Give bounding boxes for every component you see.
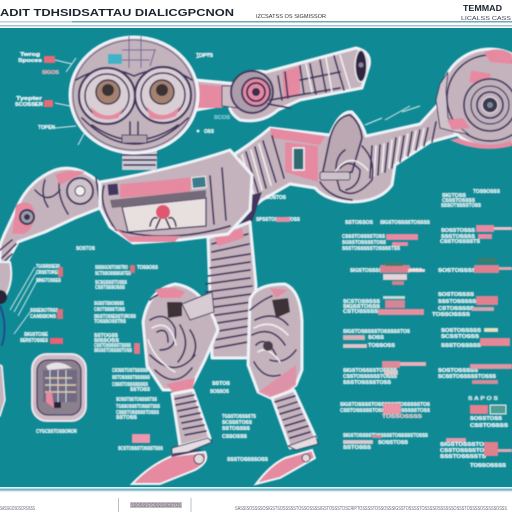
callouts: centre column: SISSOSS bbox=[94, 338, 119, 344]
row 6: CSSTOSSSSTOS bbox=[440, 448, 488, 454]
callouts: centre column: SSTOSS bbox=[130, 387, 150, 393]
callouts: upper right: SIGSTOSSSSTOSSSS bbox=[380, 220, 430, 226]
callouts: under torso and between legs: SCSSSTOSS bbox=[222, 420, 252, 426]
callouts: left column: SIGSTOSE bbox=[24, 332, 48, 338]
callouts: upper right bbox=[256, 106, 512, 252]
row 4: SSSTOSSSSTOSS bbox=[343, 380, 391, 386]
chip caption: CYGCSSTOSSOROR bbox=[36, 429, 77, 435]
callouts: left column: TGOSRSSESS bbox=[36, 264, 60, 270]
callouts: centre column: SIGSTOSSESSTOROSS bbox=[94, 314, 136, 320]
row 3: TOSSOSS bbox=[368, 343, 395, 349]
callouts: upper right: SOSSTOSSS bbox=[441, 228, 475, 234]
row 6: SIGSTOSSSTOS bbox=[440, 442, 488, 448]
row 4 bbox=[343, 361, 512, 386]
callouts: head bbox=[15, 52, 230, 145]
robot spine bbox=[206, 222, 256, 358]
callouts: left column: SSSESOTRSS bbox=[30, 308, 58, 314]
row 4: SIGSTOSSSSTOSSSS bbox=[343, 368, 397, 374]
callouts: centre column: CSSTSSSOSSS bbox=[95, 285, 125, 291]
callouts: centre column: SSTOSS bbox=[116, 415, 137, 421]
callouts: head: Spoces bbox=[18, 58, 42, 64]
callouts: upper right: SSTOSSOS bbox=[345, 220, 373, 226]
callouts: upper right: CSSSTOSSSSTOSS bbox=[342, 234, 385, 240]
footer: centre box bbox=[118, 498, 191, 512]
footer: centre box: SSOSSISTOSSSSIGSTOS bbox=[131, 503, 182, 509]
callouts: centre column: TOSSSOSSTRS bbox=[94, 319, 126, 325]
robot head bbox=[70, 36, 198, 170]
callouts: upper right: TOSSOSSS bbox=[473, 189, 500, 195]
row 2: SIGSSTOSSS bbox=[343, 304, 380, 310]
callouts: centre column: SGSSTSSOSSSS bbox=[94, 301, 124, 307]
row 2: SOSTOSSSS bbox=[438, 292, 474, 298]
callouts: centre column: CSSSTOSSSSSSSS bbox=[112, 382, 148, 388]
title: ADIT TDHSIDSATTAU DIALICGPCNON bbox=[0, 8, 234, 19]
callouts: centre column: TOSSOSS bbox=[137, 265, 158, 271]
callouts: upper right: SSSOTSSSSTOSS bbox=[441, 203, 481, 209]
row 2: CSTOSSSSS bbox=[343, 309, 378, 315]
callouts: centre column: SIGSSTOSSSSTOSS bbox=[94, 348, 132, 354]
callouts: centre column: SCSGSSSTOSSS bbox=[95, 280, 127, 286]
right foot bbox=[256, 436, 318, 484]
robot torso bbox=[100, 150, 252, 243]
callouts: right rows bbox=[340, 258, 512, 469]
callouts: centre column: CIOSSTOSTSSSSS bbox=[112, 368, 148, 374]
row 3: SCSSTOSSS bbox=[441, 334, 479, 340]
header right label: TEMMAD bbox=[463, 4, 502, 13]
callouts: under torso and between legs: TGSSTOSSSSTS bbox=[222, 414, 256, 420]
callouts: head: Tyepter bbox=[16, 96, 43, 102]
row 2: CSTOSSSSS bbox=[438, 306, 474, 312]
callouts: centre column: SCSTOSSSTOSSSTSSS bbox=[118, 446, 163, 452]
callouts: head: SIGOS bbox=[42, 70, 59, 76]
control chip module bbox=[32, 354, 86, 421]
row 2 bbox=[343, 292, 498, 318]
row 2: SCSTOSSSSS bbox=[343, 299, 380, 305]
row 6: SSSTOSSSSTS bbox=[440, 454, 486, 460]
callouts: centre column bbox=[94, 265, 163, 452]
row 6: SIGSTOSSSSTOSSSSSTOSSSSSTOSSS bbox=[343, 433, 428, 439]
callouts: centre column: CSOTSSSSTOSS bbox=[94, 307, 125, 313]
row 5: CSSTOSSSS bbox=[470, 423, 508, 429]
robot left arm bbox=[0, 168, 105, 418]
row 3 bbox=[343, 328, 510, 349]
callouts: head: SCOS bbox=[214, 115, 230, 121]
callouts: centre column: TGSSOSSSTOSSSTSSS bbox=[116, 404, 160, 410]
callouts: left column bbox=[10, 264, 63, 344]
callouts: left column: CRSSTORES bbox=[36, 270, 60, 276]
header right label: LICALSS CASS bbox=[461, 16, 511, 22]
callouts: upper right: SSSTOSSSS bbox=[441, 234, 475, 240]
callouts: under torso and between legs: SSTOSSSS bbox=[222, 426, 250, 432]
robot left leg bbox=[132, 284, 218, 484]
footer rules bbox=[0, 487, 512, 492]
callouts: centre column: CSSSTOSSSSSTOSSS bbox=[116, 410, 159, 416]
callouts: upper right: CSSTOSSSSTS bbox=[440, 239, 480, 245]
callouts: under torso and between legs: SSSTOSSSSOSS bbox=[227, 457, 268, 463]
neck bbox=[122, 150, 157, 170]
callouts: centre column: SCTSSOSSSIGSTES bbox=[95, 271, 131, 277]
callouts: upper right: SPSSTOSSSSTOSS bbox=[256, 217, 300, 223]
row 2: TOSSOSSSS bbox=[432, 312, 470, 318]
row 3: SIGSTOSSSSSTOSSSSSTOS bbox=[343, 329, 410, 335]
row 1 bbox=[350, 258, 512, 285]
robot right leg bbox=[248, 284, 318, 484]
row 4: SOSTOSSSSS bbox=[438, 368, 478, 374]
left shin bbox=[172, 390, 210, 446]
robot arm: ribbed forearm bbox=[222, 100, 456, 224]
callouts: head: TOPTS bbox=[196, 53, 213, 59]
right shin bbox=[272, 390, 316, 448]
row 5: CSSTOSSSSSTOSSSSSTOSSSSSTOSS bbox=[340, 408, 430, 414]
callouts: head: Twrog bbox=[20, 52, 40, 58]
callouts: upper right: SOSTOS bbox=[266, 195, 286, 201]
row 1: SOSTOSSSS bbox=[438, 268, 476, 274]
row 3: SOSTOSSSSS bbox=[441, 328, 481, 334]
callouts: head: SCOSSER bbox=[15, 102, 43, 108]
row 5: TOSSOSSSS bbox=[382, 414, 422, 420]
callouts: centre column: SOSSTSSTOSSSSTSS bbox=[116, 397, 157, 403]
callouts: centre column: CSSTOSSSSSTSSSS bbox=[94, 343, 131, 349]
row 5: SOSSTOSS bbox=[470, 416, 502, 422]
callouts: under torso and between legs: SOSSOS bbox=[210, 389, 229, 395]
row 6: SSTOSSS bbox=[343, 445, 371, 451]
callouts: under torso and between legs: CSSOSSS bbox=[222, 434, 247, 440]
row 5: SIGSTOSSSSTOSSSSSSTOSSSSSTOS bbox=[340, 402, 430, 408]
callouts: under torso and between legs bbox=[76, 246, 268, 463]
footer: left note: SASSIGOSOSCRSISSS bbox=[0, 506, 35, 512]
callouts: centre column: SSSSGOSTOSSTRO bbox=[95, 265, 128, 271]
row 1: SIGSTOSSSSTOSSSSSTOSSS bbox=[350, 268, 422, 274]
row 3: SOSS bbox=[368, 335, 384, 341]
row 2: SSSTOSSSSS bbox=[438, 299, 476, 305]
robot arm: upper cannon arm bbox=[196, 48, 369, 121]
header subtitle: IZCSATSS OS SIGMISSOR bbox=[256, 14, 326, 20]
callouts: upper right: SGSSTOSSSSTOSS bbox=[342, 240, 386, 246]
row 6: TOSSOSSSS bbox=[470, 463, 506, 469]
callouts: centre column: SSTOSSSSTSSSSSS bbox=[112, 375, 150, 381]
row 5: S A P O S bbox=[468, 396, 498, 402]
row 4: CSSTOSSSSSSTOSSS bbox=[343, 374, 397, 380]
row 5 bbox=[340, 396, 508, 429]
header right label bbox=[461, 4, 511, 22]
callouts: head: TOPEN bbox=[38, 125, 55, 131]
row 6 bbox=[343, 433, 512, 469]
callouts: left column: SERSTOSSES bbox=[20, 338, 48, 344]
callouts: left column: CANSSIONS bbox=[30, 314, 56, 320]
callouts: head: OSS bbox=[204, 129, 214, 135]
callouts: upper right: SIGTOSS bbox=[442, 193, 466, 199]
row 3: SSSTOSSSSS bbox=[441, 343, 481, 349]
callouts: upper right: SSSTOSSSSSTOSSSSTSS bbox=[342, 246, 400, 252]
callouts: upper right: CSSSTOSSSS bbox=[442, 198, 475, 204]
callouts: left column: SINGTOSSES bbox=[36, 278, 61, 284]
robot hand disc bbox=[436, 49, 512, 149]
callouts: centre column: SSTOGSS bbox=[94, 333, 118, 339]
callouts: under torso and between legs: SOSTOS bbox=[76, 246, 95, 252]
left foot bbox=[132, 438, 212, 484]
row 6: SOSSTOSS bbox=[378, 440, 408, 446]
callouts: under torso and between legs: SSTOS bbox=[212, 381, 230, 387]
row 4: SCSSTOSSSSSTOSSS bbox=[438, 374, 496, 380]
